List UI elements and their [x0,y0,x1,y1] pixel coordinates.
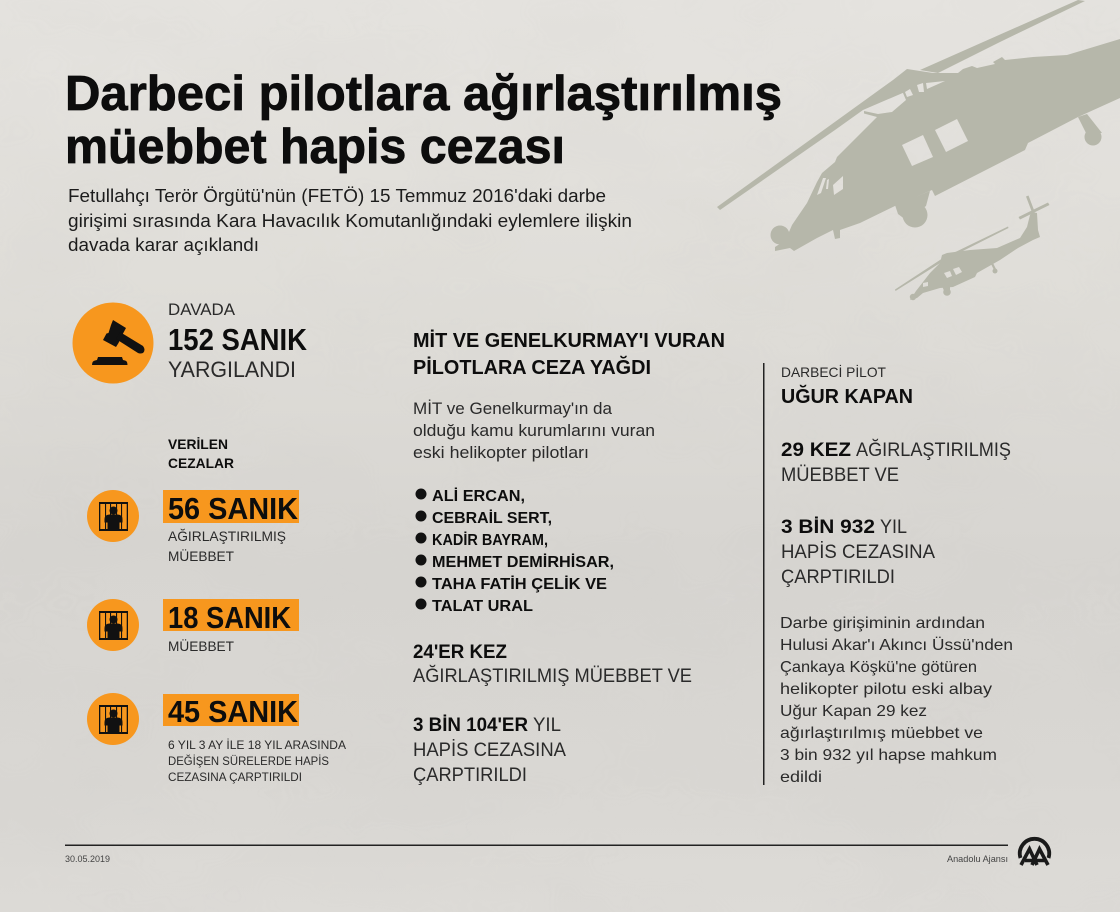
stat: 45 sanık: 6 YIL 3 AY İLE 18 YIL ARASINDA [168,738,346,752]
text block: right sentence: 3 BİN 932 [781,517,875,538]
heading: middle column: PİLOTLARA CEZA YAĞDI [413,355,651,379]
title: Darbeci pilotlara ağırlaştırılmış [65,67,782,121]
text block: middle sentence: HAPİS CEZASINA [413,740,566,761]
tail wheel [1078,114,1102,133]
right rotor blade [920,0,1085,73]
text block: right paragraph: 3 bin 932 yıl hapse mahkum [780,747,997,764]
list: pilot names: MEHMET DEMİRHİSAR, [432,553,614,571]
text block: right sentence: AĞIRLAŞTIRILMIŞ [856,439,1011,461]
list: pilot names: TAHA FATİH ÇELİK VE [432,575,607,593]
stat: 45 sanık: 45 SANIK [168,694,299,729]
text block: middle sentence: YIL [533,715,561,736]
stat: 18 sanık [163,599,299,654]
text block: middle intro: MİT ve Genelkurmay'ın da [413,399,613,418]
text block: middle sentence [413,642,692,786]
nose sensor [770,226,790,244]
stat: 18 sanık: 18 SANIK [168,600,292,635]
text block: right sentence: HAPİS CEZASINA [781,542,935,563]
list: pilot names: TALAT URAL [432,598,533,615]
icon: prison 3 [87,693,139,745]
stat: 152 sanık: DAVADA [168,301,235,319]
tail rotor [1018,196,1050,220]
title: müebbet hapis cezası [65,120,565,174]
stat: 152 sanık [168,301,308,382]
left rotor blade [717,80,905,210]
stat: 45 sanık [163,694,346,784]
text block: middle sentence: 3 BİN 104'ER [413,715,528,736]
text block: right paragraph: ağırlaştırılmış müebbet ve [780,725,983,742]
heading: verilen cezalar [168,436,234,471]
text block: right sentence: 29 KEZ [781,440,851,461]
list: pilot names [416,487,614,615]
text block: right sentence [781,439,1011,588]
stat: 152 sanık: 152 SANIK [168,322,308,357]
text block: right paragraph: helikopter pilotu eski albay [780,681,992,698]
footer: source: Anadolu Ajansı [947,854,1008,865]
text block: right sentence: ÇARPTIRILDI [781,567,895,588]
text block: middle intro [413,399,655,462]
heading: right column [781,363,913,408]
title [65,67,782,174]
illustration: small helicopter silhouette [895,196,1050,300]
stat: 18 sanık: MÜEBBET [168,637,234,654]
text block: right paragraph: Darbe girişiminin ardından [780,615,985,632]
icon: gavel [72,302,154,384]
stat: 45 sanık: DEĞİŞEN SÜRELERDE HAPİS [168,753,329,768]
main wheel [895,191,930,220]
heading: middle column [413,329,725,379]
text block: right paragraph: Uğur Kapan 29 kez [780,703,927,720]
fuselage [775,39,1120,251]
stat: 45 sanık: CEZASINA ÇARPTIRILDI [168,770,302,784]
stat: 152 sanık: YARGILANDI [168,357,296,382]
list: pilot names: CEBRAİL SERT, [432,509,552,527]
text block: right sentence: YIL [880,517,907,538]
illustration: large helicopter silhouette [717,0,1120,251]
icon: prison 1 [87,490,139,542]
stat: 56 sanık: AĞIRLAŞTIRILMIŞ [168,528,286,544]
text block: right paragraph: edildi [780,769,822,786]
icon: Anadolu Ajansı logo [1020,839,1049,865]
heading: verilen cezalar: CEZALAR [168,455,234,471]
text block: middle sentence: 24'ER KEZ [413,642,507,663]
list: pilot names: ALİ ERCAN, [432,487,525,505]
stat: 56 sanık: 56 SANIK [168,491,299,526]
heading: right column: UĞUR KAPAN [781,384,913,408]
text block: middle intro: eski helikopter pilotları [413,444,589,462]
subtitle: Fetullahçı Terör Örgütü'nün (FETÖ) 15 Temmuz 2016'daki darbe [68,186,606,206]
text block: middle sentence: AĞIRLAŞTIRILMIŞ MÜEBBET VE [413,665,692,687]
text block: right paragraph: Çankaya Köşkü'ne götüren [780,659,977,676]
stat: 56 sanık [163,490,299,564]
small rotor blade [895,226,1008,291]
text block: right paragraph [780,615,1013,786]
small wheels and sensor [942,285,950,293]
text block: right sentence: MÜEBBET VE [781,465,899,486]
stat: 56 sanık: MÜEBBET [168,547,234,564]
subtitle: girişimi sırasında Kara Havacılık Komutanlığındaki eylemlere ilişkin [68,211,632,231]
small fuselage [910,212,1040,300]
footer: date: 30.05.2019 [65,854,110,865]
list: pilot names: KADİR BAYRAM, [432,532,548,549]
text block: middle sentence: ÇARPTIRILDI [413,765,527,786]
heading: verilen cezalar: VERİLEN [168,436,228,452]
subtitle: davada karar açıklandı [68,235,259,255]
text block: right paragraph: Hulusi Akar'ı Akıncı Üssü'nden [780,636,1013,654]
heading: middle column: MİT VE GENELKURMAY'I VURAN [413,329,725,352]
icon: prison 2 [87,599,139,651]
heading: right column: DARBECİ PİLOT [781,363,886,380]
subtitle [68,186,632,255]
text block: middle intro: olduğu kamu kurumlarını vuran [413,422,655,440]
